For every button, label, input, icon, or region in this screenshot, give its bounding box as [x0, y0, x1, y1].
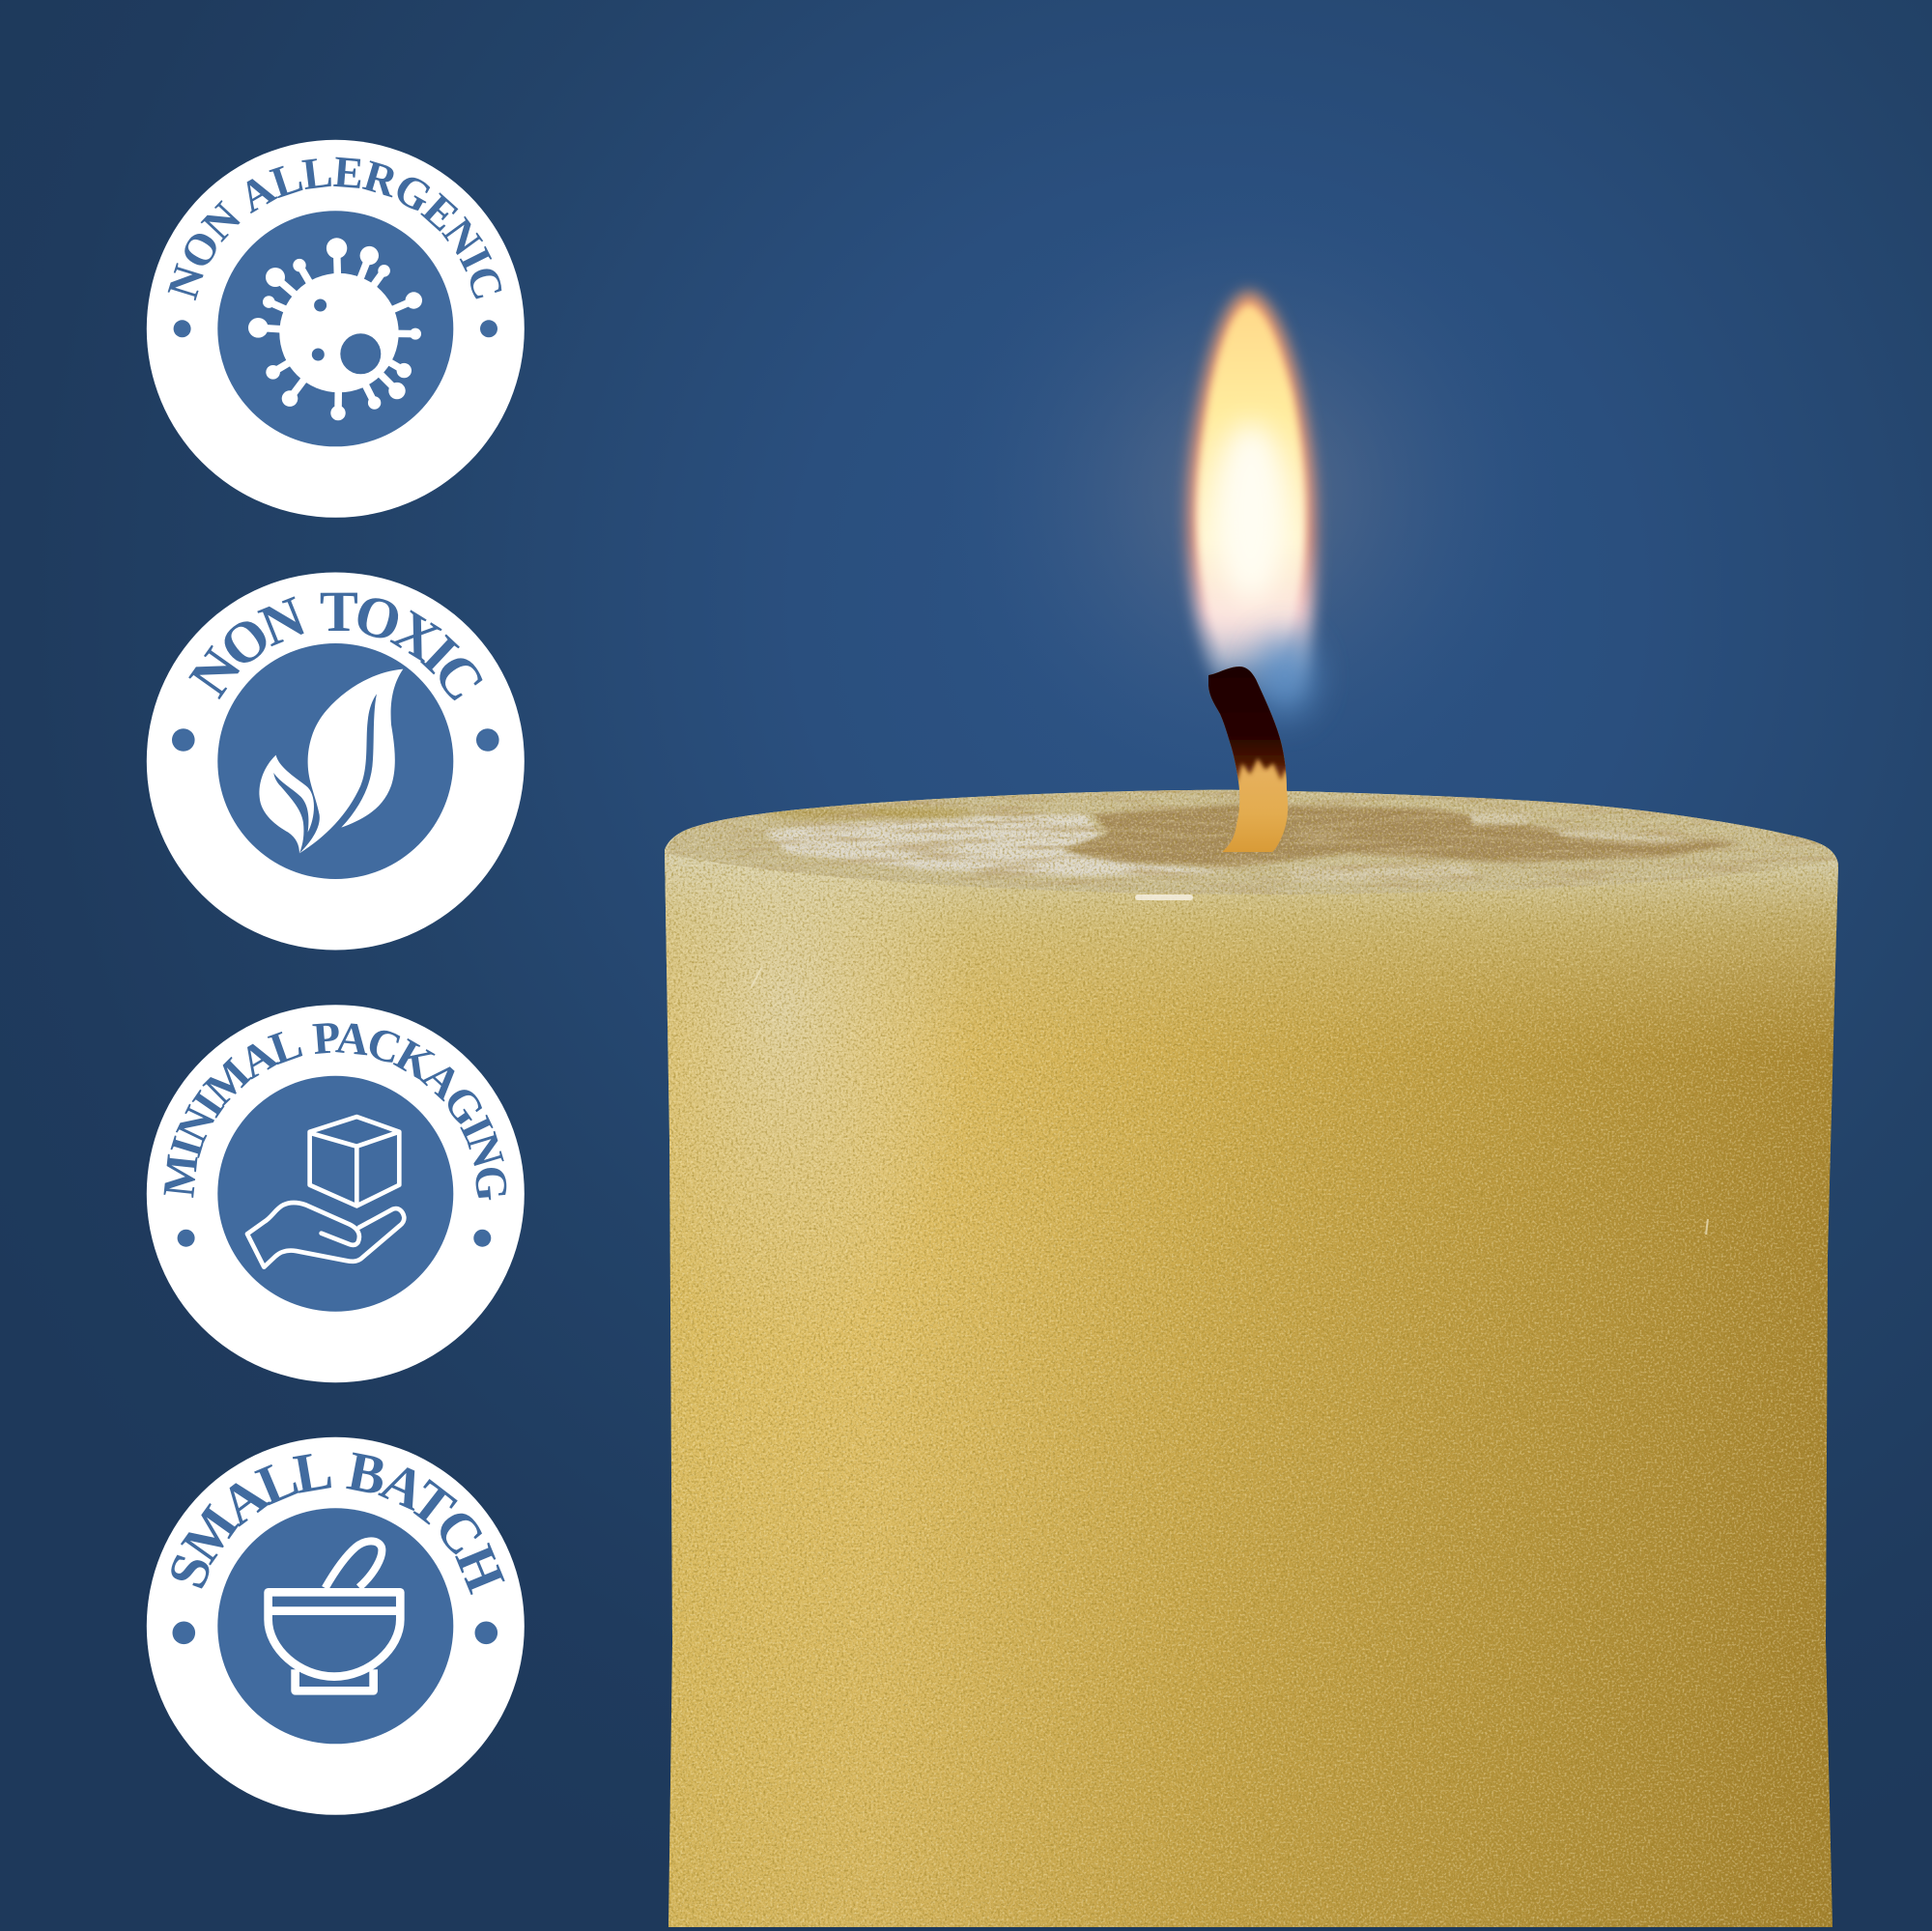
flame outer edge [1188, 292, 1315, 710]
badge: non allergenic [147, 139, 525, 518]
box [310, 1117, 399, 1206]
side dots [174, 320, 497, 337]
pestle [326, 1541, 382, 1588]
badge label: MINIMAL PACKAGING [164, 1023, 506, 1200]
flame white core [1214, 423, 1288, 601]
wick wax [1208, 667, 1289, 852]
wax scratch [752, 968, 1708, 1235]
wick [1208, 667, 1289, 852]
candle grain [657, 782, 1845, 1931]
badge disc [147, 1437, 525, 1815]
candle body [657, 782, 1845, 1931]
badge: small batch [147, 1437, 525, 1815]
candle top surface [667, 790, 1837, 895]
icon: hand holding box [247, 1117, 404, 1267]
side dots [172, 728, 499, 752]
small leaf [259, 755, 314, 853]
side dots [172, 1621, 497, 1644]
pale wax pool [764, 814, 1234, 876]
bowl [269, 1592, 400, 1677]
pale flecks [1289, 811, 1703, 881]
flame [1188, 292, 1315, 717]
large leaf [299, 669, 403, 853]
icon: virus [248, 238, 422, 420]
badge label: NON TOXIC [188, 593, 483, 701]
badge disc [147, 572, 525, 951]
mortar base [296, 1669, 374, 1690]
wax highlight [1135, 895, 1193, 900]
badge label: NON ALLERGENIC [168, 156, 502, 301]
candle [657, 782, 1845, 1931]
badge: minimal packaging [147, 1005, 525, 1383]
badge label: SMALL BATCH [171, 1453, 505, 1596]
icon disc [217, 643, 453, 879]
flame yellow body [1197, 305, 1305, 667]
badge disc [147, 140, 525, 518]
icon disc [217, 1508, 453, 1744]
flame glow [942, 184, 1560, 802]
badge: non toxic [147, 572, 525, 951]
side dots [178, 1230, 491, 1247]
brown wax pool [1062, 805, 1743, 866]
badge disc [147, 1005, 525, 1382]
hand [247, 1203, 404, 1267]
icon disc [217, 211, 453, 446]
wick char [1208, 667, 1287, 783]
icon disc [217, 1076, 453, 1312]
icon: leaves [259, 669, 403, 853]
flame blue base [1256, 636, 1314, 717]
icon: mortar and pestle [269, 1541, 400, 1690]
